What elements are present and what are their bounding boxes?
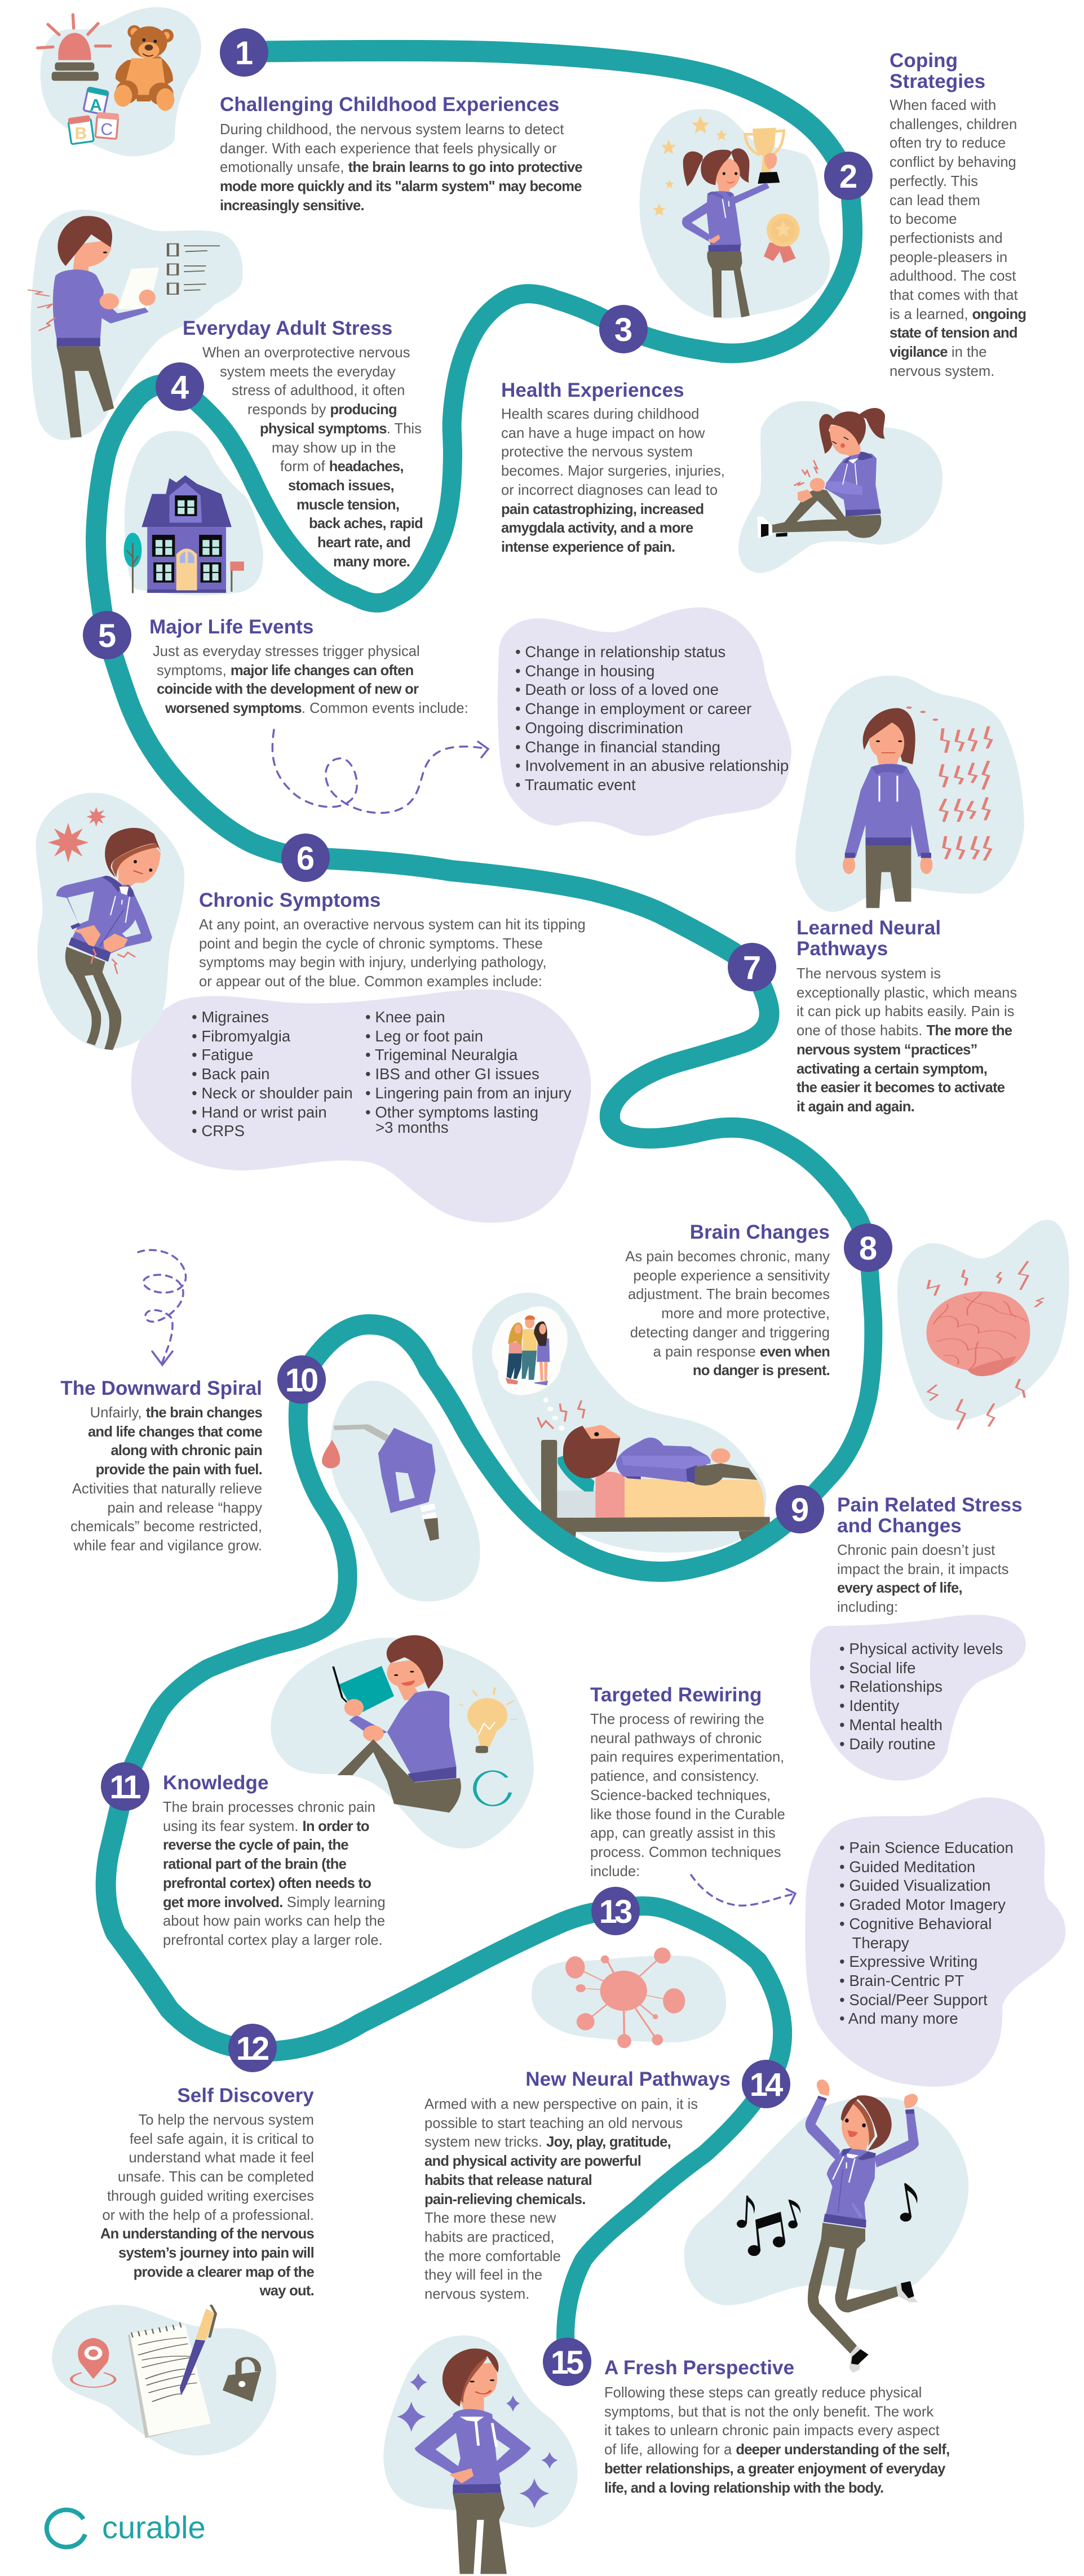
dashed curly arrow: downward spiral — [138, 1250, 186, 1365]
text: everyday adult stress, shaped along the path: responds by producing — [247, 402, 397, 418]
logo: curable: curable — [102, 2510, 206, 2545]
lavender panel: chronic symptoms list — [131, 990, 591, 1223]
illustration: seated girl holding painful knee — [738, 401, 943, 573]
heading: everyday adult stress: Everyday Adult Stress — [183, 317, 392, 339]
heading: major life events: Major Life Events — [149, 616, 313, 638]
text: knowledge: The brain processes chronic pain using its fear system. In order to reverse the cycle of pain, the rational part of the brain (the prefrontal cortex) often needs to get more involved. Simply learning about how pain works can help the prefrontal cortex play a larger role. — [163, 1799, 386, 1948]
illustration: house with tree and mailbox — [124, 431, 263, 595]
step badges 1 to 15: 6 — [297, 840, 315, 877]
step badges 1 to 15: 12 — [236, 2030, 268, 2067]
illustration: tense woman with pain bolts — [795, 676, 1024, 912]
list: chronic symptoms column two: >3 months — [375, 1119, 449, 1136]
text: coping strategies: When faced with challenges, children often try to reduce conflict by behaving perfectly. This can lead them to become perfectionists and people-pleasers in adulthood. The cost that comes with that is a learned, ongoing state of tension and vigilance in the nervous system. — [890, 97, 1026, 379]
illustration: girl holding trophy with stars and medal — [640, 109, 830, 318]
text: everyday adult stress, shaped along the path: stress of adulthood, it often — [232, 383, 405, 398]
text: everyday adult stress, shaped along the path: system meets the everyday — [220, 364, 396, 380]
list: aspects of life: • Physical activity levels • Social life • Relationships • Identity • Mental health • Daily routine — [839, 1640, 1003, 1753]
illustration: siren, teddy bear and alphabet blocks: B — [74, 125, 87, 143]
heading: health experiences: Health Experiences — [501, 379, 684, 401]
step badges 1 to 15: 1 — [235, 35, 253, 72]
step badges 1 to 15: 8 — [859, 1230, 877, 1267]
illustration: fuel pump nozzle with drop — [322, 1381, 480, 1602]
step badges 1 to 15: 15 — [551, 2344, 583, 2381]
illustration: girl reading a book with lightbulb — [271, 1635, 534, 1848]
illustration: smiling woman with sparkles — [383, 2335, 578, 2574]
text: everyday adult stress, shaped along the path: heart rate, and — [317, 535, 410, 551]
list: chronic symptoms column two: • Knee pain • Leg or foot pain • Trigeminal Neuralgia • IBS and other GI issues • Lingering pain from an injury • Other symptoms lasting — [365, 1008, 572, 1121]
heading: brain changes: Brain Changes — [690, 1221, 830, 1243]
illustration: woman in bed with thought bubble — [472, 1293, 770, 1553]
text: everyday adult stress, shaped along the path: form of headaches, — [280, 459, 404, 475]
heading: new neural pathways: New Neural Pathways — [525, 2068, 731, 2090]
text: everyday adult stress, shaped along the path: physical symptoms. This — [260, 421, 422, 437]
step badges 1 to 15 — [83, 28, 892, 2386]
heading: targeted rewiring: Targeted Rewiring — [590, 1684, 762, 1706]
illustration: siren, teddy bear and alphabet blocks: A — [90, 96, 102, 115]
heading: the downward spiral: The Downward Spiral — [60, 1377, 262, 1399]
list: common life events: • Change in relationship status • Change in housing • Death or loss of a loved one • Change in employment or career • Ongoing discrimination • Change in financial standing • Involvement in an abusive relationship • Traumatic event — [515, 643, 789, 793]
step badges 1 to 15: 3 — [614, 312, 632, 348]
text: everyday adult stress, shaped along the path: muscle tension, — [297, 497, 399, 513]
text: brain changes: As pain becomes chronic, many people experience a sensitivity adjustment. The brain becomes more and more protective, detecting danger and triggering a pain response even when no danger is present. — [625, 1249, 830, 1378]
heading: chronic symptoms: Chronic Symptoms — [199, 889, 380, 911]
illustration: siren, teddy bear and alphabet blocks: C — [100, 120, 113, 139]
text: major life events: worsened symptoms. Common events include: — [165, 700, 468, 716]
heading: self discovery: Self Discovery — [177, 2085, 314, 2107]
illustration: woman clutching stomach with pain stars — [36, 793, 184, 1050]
lavender panel: rewiring techniques list — [805, 1797, 1065, 2087]
step badges 1 to 15: 14 — [750, 2067, 783, 2103]
step badges 1 to 15: 10 — [285, 1362, 317, 1399]
text: everyday adult stress, shaped along the path: stomach issues, — [288, 478, 394, 494]
step badges 1 to 15: 5 — [98, 618, 116, 654]
step badges 1 to 15: 2 — [839, 158, 857, 195]
text: challenging childhood experiences: During childhood, the nervous system learns to detect danger. With each experience that feels physically or emotionally unsafe, the brain learns to go into protective mode more quickly and its "alarm system" may become increasingly sensitive. — [220, 122, 582, 214]
list: chronic symptoms column one: • Migraines • Fibromyalgia • Fatigue • Back pain • Neck or shoulder pain • Hand or wrist pain • CRPS — [192, 1008, 353, 1140]
heading: learned neural pathways: Learned Neural Pathways — [797, 917, 941, 960]
illustration: woman with tablet and checklist — [28, 210, 242, 440]
step badges 1 to 15: 9 — [791, 1492, 809, 1528]
text: everyday adult stress, shaped along the path — [202, 345, 423, 570]
text: major life events: coincide with the development of new or — [157, 681, 418, 697]
logo: curable — [47, 2510, 206, 2547]
text: a fresh perspective: Following these steps can greatly reduce physical symptoms, but that is not the only benefit. The work it takes to unlearn chronic pain impacts every aspect of life, allowing for a deeper understanding of the self, better relationships, a greater enjoyment of everyday life, and a loving relationship with the body. — [604, 2385, 949, 2496]
lavender panel: pain related changes list — [810, 1615, 1026, 1781]
text: targeted rewiring: The process of rewiring the neural pathways of chronic pain requires experimentation, patience, and consistency. Science-backed techniques, like those found in the Curable app, can greatly assist in this process. Common techniques include: — [590, 1712, 785, 1879]
step badges 1 to 15: 13 — [599, 1894, 632, 1930]
heading: challenging childhood experiences: Challenging Childhood Experiences — [220, 94, 559, 116]
dashed arrow: rewiring techniques to list — [691, 1875, 795, 1905]
text: everyday adult stress, shaped along the path: When an overprotective nervous — [202, 345, 410, 361]
illustration: notebook with pen, map pin and open padlock — [52, 2305, 276, 2455]
text: major life events — [153, 644, 468, 716]
text: new neural pathways: Armed with a new perspective on pain, it is possible to start teaching an old nervous system new tricks. Joy, play, gratitude, and physical activity are powerful habits that release natural pain-relieving chemicals. The more these new habits are practiced, the more comfortable they will feel in the nervous system. — [424, 2096, 698, 2302]
illustration: neuron — [532, 1948, 726, 2048]
text: the downward spiral: Unfairly, the brain changes and life changes that come along with chronic pain provide the pain with fuel. Activities that naturally relieve pain and release “happy chemicals” become restricted, while fear and vigilance grow. — [70, 1405, 262, 1554]
text: everyday adult stress, shaped along the path: many more. — [333, 554, 410, 570]
step badges 1 to 15: 4 — [171, 369, 189, 406]
text: everyday adult stress, shaped along the path: back aches, rapid — [309, 516, 423, 531]
heading: a fresh perspective: A Fresh Perspective — [604, 2357, 794, 2379]
text: health experiences: Health scares during childhood can have a huge impact on how protective the nervous system becomes. Major surgeries, injuries, or incorrect diagnoses can lead to pain catastrophizing, increased amygdala activity, and a more intense experience of pain. — [501, 406, 725, 555]
illustration: siren, teddy bear and alphabet blocks — [38, 7, 201, 156]
illustration: brain with pain bolts — [897, 1220, 1069, 1429]
step badges 1 to 15: 11 — [109, 1769, 140, 1806]
text: major life events: Just as everyday stresses trigger physical — [153, 644, 420, 659]
heading: pain related stress and changes: Pain Related Stress and Changes — [837, 1494, 1023, 1537]
list: rewiring techniques: • Pain Science Education • Guided Meditation • Guided Visualization • Graded Motor Imagery • Cognitive Behavioral Therapy • Expressive Writing • Brain-Centric PT • Social/Peer Support • And many more — [839, 1839, 1014, 2027]
text: self discovery: To help the nervous system feel safe again, it is critical to understand what made it feel unsafe. This can be completed through guided writing exercises or with the help of a professional. An understanding of the nervous system’s journey into pain will provide a clearer map of the way out. — [100, 2112, 314, 2299]
text: everyday adult stress, shaped along the path: may show up in the — [272, 440, 396, 456]
step badges 1 to 15: 7 — [743, 950, 761, 986]
heading: coping strategies: Coping Strategies — [890, 50, 985, 92]
text: chronic symptoms: At any point, an overactive nervous system can hit its tipping point and begin the cycle of chronic symptoms. These symptoms may begin with injury, underlying pathology, or appear out of the blue. Common examples include: — [199, 917, 586, 990]
text: pain related stress and changes: Chronic pain doesn’t just impact the brain, it impacts every aspect of life, including: — [837, 1542, 1008, 1615]
dashed curly arrow: life events to list — [272, 730, 488, 813]
winding teal path connecting the steps — [96, 51, 873, 2361]
lavender panel: major life events list — [498, 608, 791, 836]
text: learned neural pathways: The nervous system is exceptionally plastic, which means it can pick up habits easily. Pain is one of those habits. The more the nervous system “practices” activating a certain symptom, the easier it becomes to activate it again and again. — [797, 966, 1017, 1115]
heading: knowledge: Knowledge — [163, 1772, 269, 1794]
illustration: jumping woman with music notes — [684, 2080, 968, 2373]
text: major life events: symptoms, major life changes can often — [157, 663, 413, 679]
